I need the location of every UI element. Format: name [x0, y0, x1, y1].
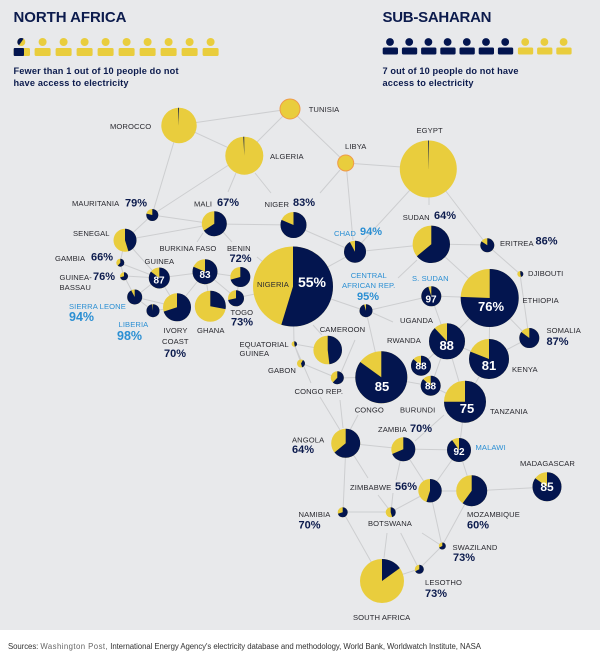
node: Djibouti: DJIBOUTI: [528, 269, 563, 278]
node: Botswana: [368, 507, 413, 528]
node: Central African Republic: CENTRAL: [351, 271, 387, 280]
node: Madagascar: MADAGASCAR: [520, 459, 575, 468]
node: Egypt: EGYPT: [416, 126, 443, 135]
node: Ethiopia: 76%: [478, 299, 504, 314]
node: Burkina Faso: 83: [199, 270, 211, 281]
node: Mozambique: 60%: [467, 520, 489, 532]
node: South Africa: SOUTH AFRICA: [353, 613, 411, 622]
node: Namibia: 70%: [298, 520, 321, 532]
node: Madagascar: [520, 459, 575, 501]
node: Guinea: [144, 257, 175, 288]
node: Equatorial Guinea: EQUATORIAL: [240, 340, 289, 349]
node: Zambia: ZAMBIA: [378, 425, 408, 434]
node: South Sudan: 97: [425, 294, 437, 305]
node: Angola: ANGOLA: [292, 436, 325, 444]
node: Eritrea: ERITREA: [500, 239, 534, 248]
title: North Africa: NORTH AFRICA: [14, 9, 127, 26]
node: Rwanda: [387, 336, 431, 376]
node: Mozambique: MOZAMBIQUE: [467, 510, 520, 519]
node: Gabon: GABON: [268, 366, 296, 375]
node: Guinea-Bissau: 76%: [93, 271, 115, 283]
node: Central African Republic: AFRICAN REP.: [342, 281, 395, 290]
node: Uganda: [400, 316, 465, 359]
text: Sub-Saharan caption: 7 out of 10 people do not have: [382, 66, 518, 76]
node: Congo: [355, 351, 407, 415]
node: Zimbabwe: 56%: [395, 481, 417, 493]
node: Benin: 72%: [230, 253, 252, 265]
node: Burkina Faso: BURKINA FASO: [160, 244, 216, 253]
text: North Africa caption: have access to electricity: [14, 78, 129, 88]
node: South Sudan: [412, 274, 449, 306]
node: Zimbabwe: [350, 479, 442, 502]
node: Uganda: 88: [439, 338, 454, 353]
node: Nigeria: [253, 246, 333, 326]
node: Burundi: [400, 376, 441, 415]
node: Botswana: BOTSWANA: [368, 519, 413, 528]
node: Togo: [228, 290, 253, 328]
text: Sub-Saharan caption: access to electricity: [382, 78, 474, 88]
node: Burundi: BURUNDI: [400, 406, 435, 415]
node: Algeria: [225, 137, 304, 175]
node: Chad: CHAD: [334, 229, 356, 238]
node: Tunisia: TUNISIA: [309, 105, 340, 114]
node: Gambia: GAMBIA: [55, 254, 86, 263]
node: Morocco: MOROCCO: [110, 122, 151, 131]
node: Senegal: SENEGAL: [73, 229, 110, 238]
node: Tunisia: [280, 99, 340, 119]
node: Burundi: 88: [425, 382, 436, 393]
node: Swaziland: SWAZILAND: [452, 543, 498, 552]
node: Equatorial Guinea: GUINEA: [240, 349, 270, 358]
node: Zambia: [378, 423, 432, 461]
node: Namibia: [298, 507, 348, 532]
node: Swaziland: 73%: [453, 552, 475, 564]
node: Guinea: GUINEA: [144, 257, 175, 266]
node: Rwanda: RWANDA: [387, 336, 422, 345]
node: Ivory Coast: 70%: [164, 348, 186, 360]
node: Benin: [227, 244, 252, 287]
title: Sub-Saharan: SUB-SAHARAN: [382, 9, 492, 26]
node: Malawi: 92: [453, 447, 465, 458]
node: Chad: [334, 226, 382, 263]
node: Mauritania: MAURITANIA: [72, 199, 120, 208]
node: Congo: CONGO: [355, 406, 384, 415]
pictogram: Sub-Saharan people: [383, 38, 572, 54]
node: Liberia: 98%: [117, 329, 142, 343]
node: Congo Republic: [294, 371, 344, 396]
node: Sierra Leone: [69, 290, 142, 324]
node: Chad: 94%: [360, 226, 382, 238]
node: Togo: 73%: [231, 316, 253, 328]
node: Angola: 64%: [292, 444, 314, 456]
node: Zambia: 70%: [410, 423, 432, 435]
source line: Sources: Washington Post, International Energy Agency's electricity database and methodology, World Bank, Worldwatch Institute, NASA: [8, 642, 482, 651]
node: Sudan: [403, 210, 456, 263]
node: Zimbabwe: ZIMBABWE: [350, 483, 391, 492]
node: Cameroon: CAMEROON: [320, 325, 365, 334]
node: Ethiopia: ETHIOPIA: [522, 296, 560, 305]
node: Libya: [338, 142, 367, 171]
pictogram: North Africa people: [14, 36, 219, 56]
node: Nigeria: NIGERIA: [257, 280, 290, 289]
node: Gabon: [268, 360, 305, 375]
node: Niger: 83%: [293, 197, 315, 209]
node: Lesotho: LESOTHO: [425, 578, 462, 587]
node: Burkina Faso: [160, 244, 218, 284]
node: Sierra Leone: 94%: [69, 310, 94, 324]
node: Tanzania: TANZANIA: [490, 407, 529, 416]
node: Ivory Coast: IVORY: [164, 326, 188, 335]
node: Niger: [264, 197, 315, 238]
node: Mauritania: [72, 198, 158, 221]
node: Guinea-Bissau: BASSAU: [60, 283, 91, 292]
node: Mali: 67%: [217, 197, 239, 209]
node: Egypt: [400, 126, 457, 198]
node: Congo: 85: [375, 379, 389, 394]
network connection lines: [120, 109, 547, 581]
node: Kenya: [469, 339, 539, 379]
node: Malawi: [447, 438, 506, 462]
node: Libya: LIBYA: [345, 142, 367, 151]
node: Liberia: LIBERIA: [118, 320, 149, 329]
node: Central African Republic: [342, 271, 395, 317]
node: Ivory Coast: COAST: [162, 337, 189, 346]
node: Equatorial Guinea: [240, 340, 297, 358]
node: Algeria: ALGERIA: [270, 152, 304, 161]
node: Sudan: SUDAN: [403, 213, 430, 222]
node: Ghana: GHANA: [197, 326, 225, 335]
node: Nigeria: 55%: [298, 274, 327, 290]
node: Sierra Leone: SIERRA LEONE: [69, 302, 126, 311]
node: Mali: [194, 197, 239, 236]
node: Sudan: 64%: [434, 210, 456, 222]
node: Ivory Coast: [162, 293, 191, 360]
node: Guinea-Bissau: GUINEA-: [60, 273, 92, 282]
node: Lesotho: 73%: [425, 588, 447, 600]
node: Liberia: [117, 304, 160, 343]
node: Kenya: KENYA: [512, 365, 539, 374]
node: Malawi: MALAWI: [476, 443, 506, 452]
node: Somalia: 87%: [546, 336, 569, 348]
node: Angola: [292, 429, 360, 458]
node: Togo: TOGO: [230, 308, 253, 317]
node: Rwanda: 88: [415, 362, 427, 373]
node: Tanzania: 75: [460, 401, 474, 416]
node: Tanzania: [444, 381, 529, 423]
node: Central African Republic: 95%: [357, 291, 379, 303]
node: Gambia: 66%: [91, 252, 113, 264]
node: Guinea: 87: [153, 276, 165, 287]
node: Ghana: [195, 291, 226, 335]
node: Gambia: [55, 252, 124, 267]
node: Morocco: [110, 108, 197, 143]
node: Namibia: NAMIBIA: [298, 510, 331, 519]
node: Eritrea: [480, 236, 558, 252]
node: Cameroon: [313, 325, 365, 364]
node: Kenya: 81: [482, 358, 496, 373]
node: Senegal: [73, 229, 136, 252]
node: South Africa: [353, 559, 411, 622]
node: Somalia: SOMALIA: [546, 326, 582, 335]
node: Eritrea: 86%: [536, 236, 558, 248]
node: Mali: MALI: [194, 200, 212, 208]
node: Mozambique: [456, 475, 520, 532]
node: Uganda: UGANDA: [400, 316, 434, 325]
node: Ethiopia: [461, 269, 560, 327]
node: Benin: BENIN: [227, 244, 251, 253]
node: Lesotho: [415, 565, 462, 600]
node: Congo Republic: CONGO REP.: [294, 387, 343, 396]
text: North Africa caption: Fewer than 1 out of 10 people do not: [14, 66, 178, 76]
node: Niger: NIGER: [264, 200, 289, 209]
node: Guinea-Bissau: [60, 271, 128, 292]
node: Somalia: [519, 326, 582, 348]
node: Madagascar: 85: [540, 480, 554, 494]
node: Swaziland: [439, 542, 498, 564]
node: South Sudan: S. SUDAN: [412, 274, 449, 283]
node: Mauritania: 79%: [125, 198, 147, 210]
